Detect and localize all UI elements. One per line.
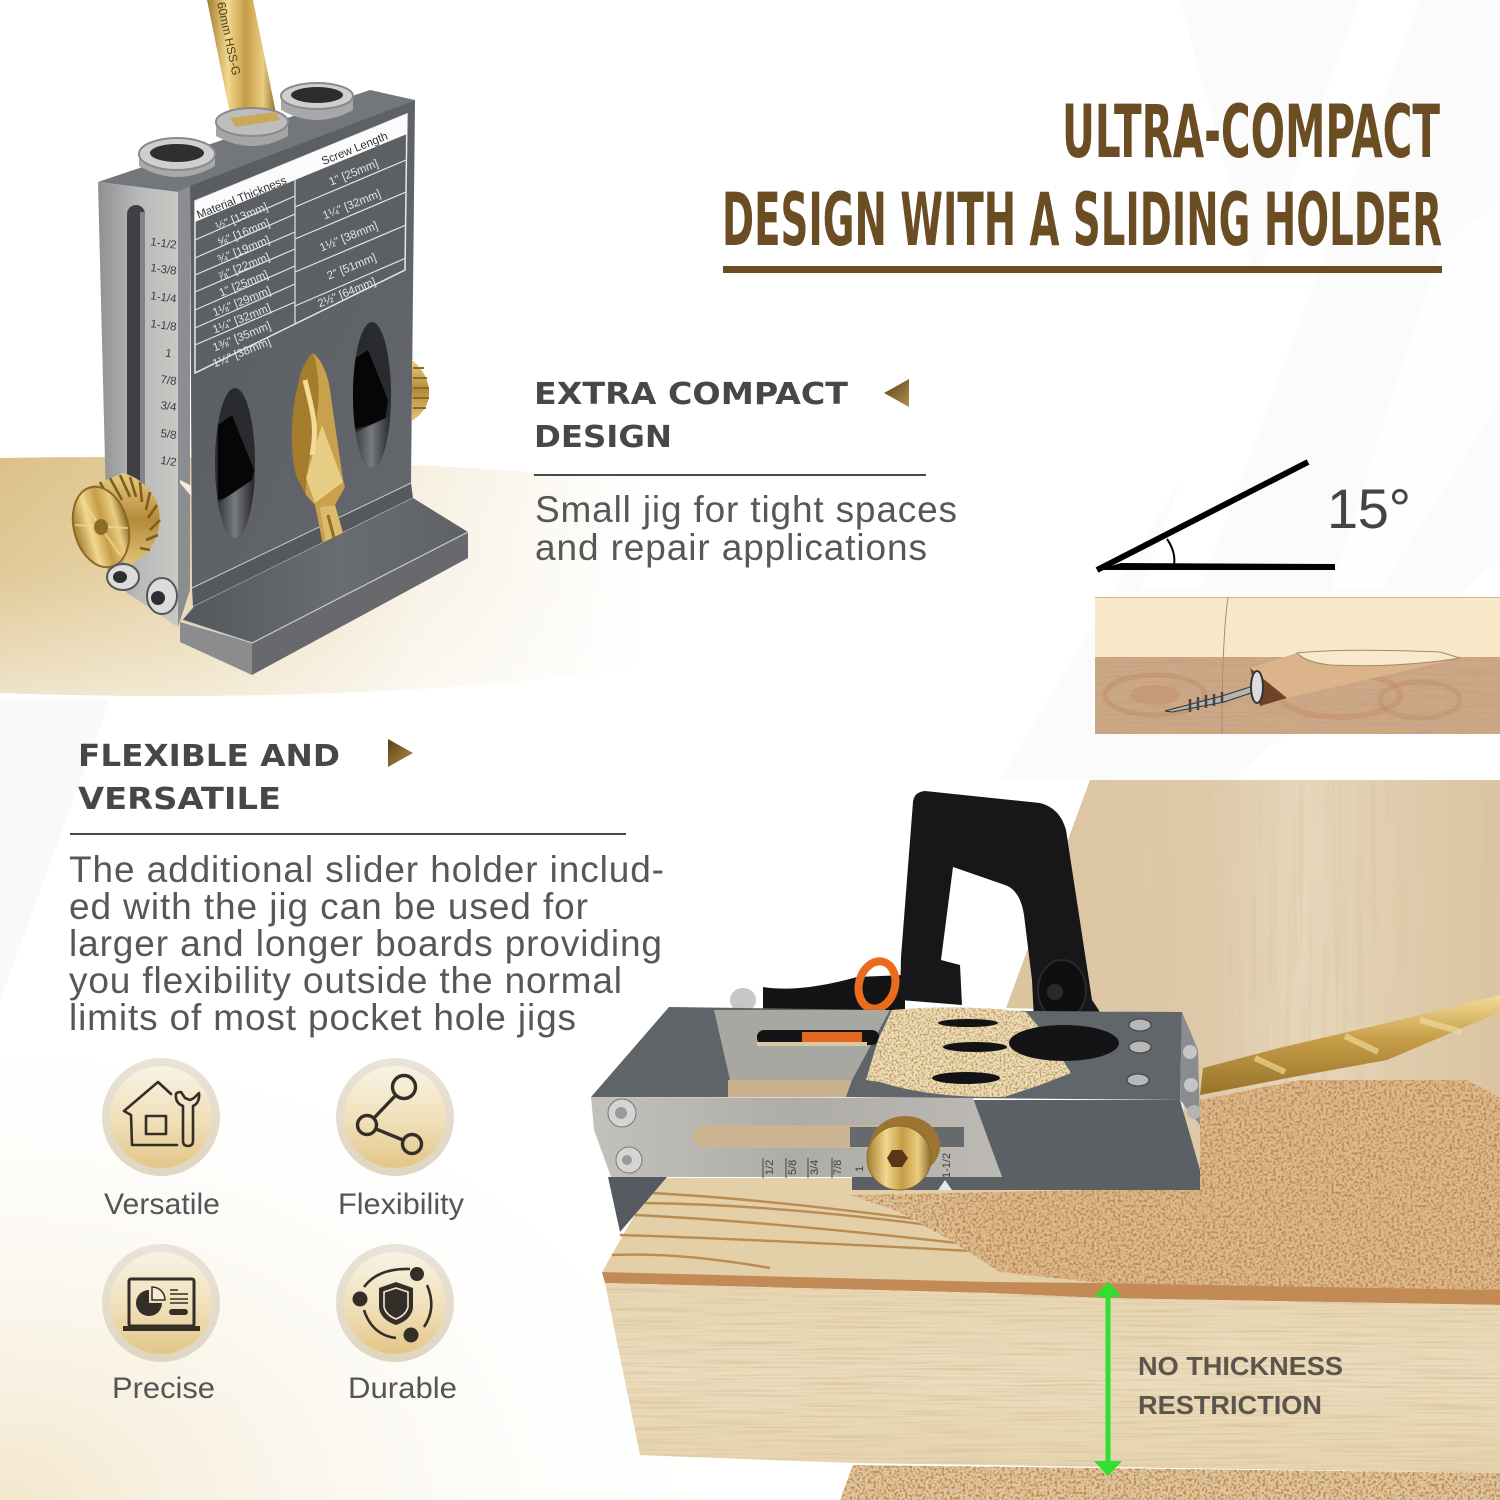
black bracket and clamp (900, 791, 1120, 1062)
reference table: material thickness and screw length: Screw Length (320, 130, 390, 168)
body text: slider holder description: larger and longer boards providing (69, 923, 662, 964)
section: extra compact design (534, 377, 957, 568)
label: no thickness restriction: RESTRICTION (1138, 1390, 1322, 1420)
body text: slider holder description: The additional slider holder includ- (69, 849, 664, 890)
label: versatile: Versatile (104, 1188, 220, 1221)
reference table: material thickness and screw length (195, 114, 407, 373)
drill guide shank: 60mm HSS-G (214, 1, 243, 77)
reference table: material thickness and screw length: ⅝" [16mm] (216, 217, 272, 249)
angle diagram: 15 degrees: 15° (1327, 477, 1411, 540)
wood plug (1250, 650, 1460, 706)
reference table: material thickness and screw length: 1½" [38mm] (211, 336, 273, 370)
gold floor ellipse behind jig (0, 457, 640, 696)
sliding holder scale: 3/4 (809, 1160, 821, 1175)
reference table: material thickness and screw length: Material Thickness (195, 175, 289, 222)
reference table: material thickness and screw length: 1" [25mm] (218, 269, 270, 300)
reference table: material thickness and screw length: 1⅛" [29mm] (211, 285, 273, 319)
divider rule (70, 833, 626, 835)
metal jig body: top surface (848, 1010, 1182, 1100)
jig leg below front plate (608, 1177, 667, 1232)
body text: slider holder description (69, 849, 664, 1038)
divider rule (534, 474, 926, 476)
board edge band (602, 1272, 1500, 1305)
stainless sliding holder plate (591, 1097, 1002, 1178)
black clamp pad (1009, 1025, 1119, 1061)
label: flexibility: Flexibility (338, 1188, 464, 1221)
title underline (723, 266, 1442, 273)
inner frame and silver back plate (591, 1007, 892, 1097)
sliding holder scale: 1/2 (764, 1160, 776, 1175)
title (722, 90, 1442, 263)
sliding holder scale: 1-1/2 (941, 1153, 953, 1178)
depth scale: 1-1/4 (150, 290, 178, 306)
icon: precise laptop with chart (102, 1244, 220, 1362)
depth scale: 1/2 (160, 455, 177, 469)
depth scale: 3/4 (160, 400, 178, 414)
reference table: material thickness and screw length: 2" [51mm] (326, 252, 378, 283)
depth scale: 1 (164, 348, 172, 360)
gold step drill bit (292, 353, 356, 566)
heading: extra compact design: EXTRA COMPACT (534, 377, 849, 412)
reference table: material thickness and screw length: 1" [25mm] (328, 158, 380, 189)
arrow: right pointing triangle (388, 739, 413, 767)
jig top face with guide rings (98, 83, 415, 192)
dark gray jig side (852, 1100, 1200, 1190)
jig base plate (180, 498, 468, 675)
label: durable: Durable (348, 1372, 457, 1405)
reference table: material thickness and screw length: ⅞" [22mm] (216, 251, 272, 283)
top screws (1127, 1019, 1151, 1086)
reference table: material thickness and screw length: 1¼" [32mm] (321, 188, 383, 222)
photo: pocket hole plug and screw in wood (1095, 597, 1500, 734)
reference table: material thickness and screw length: 1¼" [32mm] (211, 302, 273, 336)
icon: durable shield with orbit (336, 1244, 454, 1362)
depth scale: 7/8 (160, 374, 177, 388)
label: no thickness restriction: NO THICKNESS (1138, 1351, 1343, 1381)
oval drill holes (215, 322, 392, 540)
upper wood board surface (1006, 780, 1500, 1300)
lower plank below board (840, 1465, 1500, 1500)
depth scale: 1-3/8 (150, 262, 177, 278)
reference table: material thickness and screw length: 2½" [64mm] (316, 276, 378, 310)
arrow: left pointing triangle (884, 379, 909, 407)
silver side plate (98, 182, 178, 627)
right side guide bolts (1180, 1012, 1201, 1125)
reference table: material thickness and screw length: ¾" [19mm] (216, 234, 272, 266)
depth scale: 5/8 (160, 428, 177, 442)
brass thumb knob left (64, 473, 160, 574)
sliding holder scale (764, 1153, 953, 1178)
body text: compact design: Small jig for tight spaces (535, 489, 957, 530)
arrow: green thickness arrow (1094, 1282, 1122, 1476)
angle diagram: 15 degrees (1097, 462, 1411, 570)
depth scale: 1-1/2 (150, 236, 177, 252)
body text: slider holder description: limits of most pocket hole jigs (69, 997, 576, 1038)
body text: slider holder description: you flexibility outside the normal (69, 960, 622, 1001)
depth scale (150, 236, 178, 469)
section: flexible and versatile (69, 739, 664, 1038)
jig front face (178, 100, 415, 627)
reference table: material thickness and screw length: ½" [13mm] (214, 201, 270, 233)
drill guide shank (207, 0, 277, 124)
front face of thick board (605, 1283, 1500, 1473)
brass thumb knob right (412, 360, 429, 421)
heading line two: VERSATILE (78, 782, 281, 817)
depth scale: 1-1/8 (150, 318, 177, 334)
reference table: material thickness and screw length: 1⅜" [35mm] (211, 320, 273, 354)
sliding holder scale: 7/8 (832, 1160, 844, 1175)
sliding holder scale: 1 (854, 1166, 866, 1172)
drill bit (1200, 995, 1500, 1095)
label: precise: Precise (112, 1372, 215, 1405)
heading line two: DESIGN (534, 420, 672, 455)
icon: versatile house and wrench (102, 1058, 220, 1176)
reference table: material thickness and screw length: 1½" [38mm] (318, 220, 380, 254)
sawdust on top of jig (866, 1007, 1071, 1097)
heading: flexible and versatile: FLEXIBLE AND (78, 739, 340, 774)
left board top surface (602, 1178, 1200, 1290)
screw (1165, 671, 1263, 712)
sawdust covered surface (850, 1080, 1500, 1290)
black handle with orange ring (730, 957, 905, 1013)
photo: jig clamped on board with sliding holder (591, 780, 1500, 1500)
product photo: compact pocket hole jig (64, 0, 468, 675)
brass thumb knob with hex socket (867, 1116, 940, 1190)
body text: compact design: and repair applications (535, 527, 927, 568)
label: no thickness restriction (1138, 1351, 1343, 1420)
white pointer mark (938, 1180, 952, 1190)
body text: compact design (535, 489, 957, 568)
sliding holder scale: 5/8 (787, 1160, 799, 1175)
icon: flexibility share nodes (336, 1058, 454, 1176)
body text: slider holder description: ed with the jig can be used for (69, 886, 588, 927)
hex bolts (107, 564, 177, 614)
drill holes in jig top (932, 1019, 1007, 1084)
